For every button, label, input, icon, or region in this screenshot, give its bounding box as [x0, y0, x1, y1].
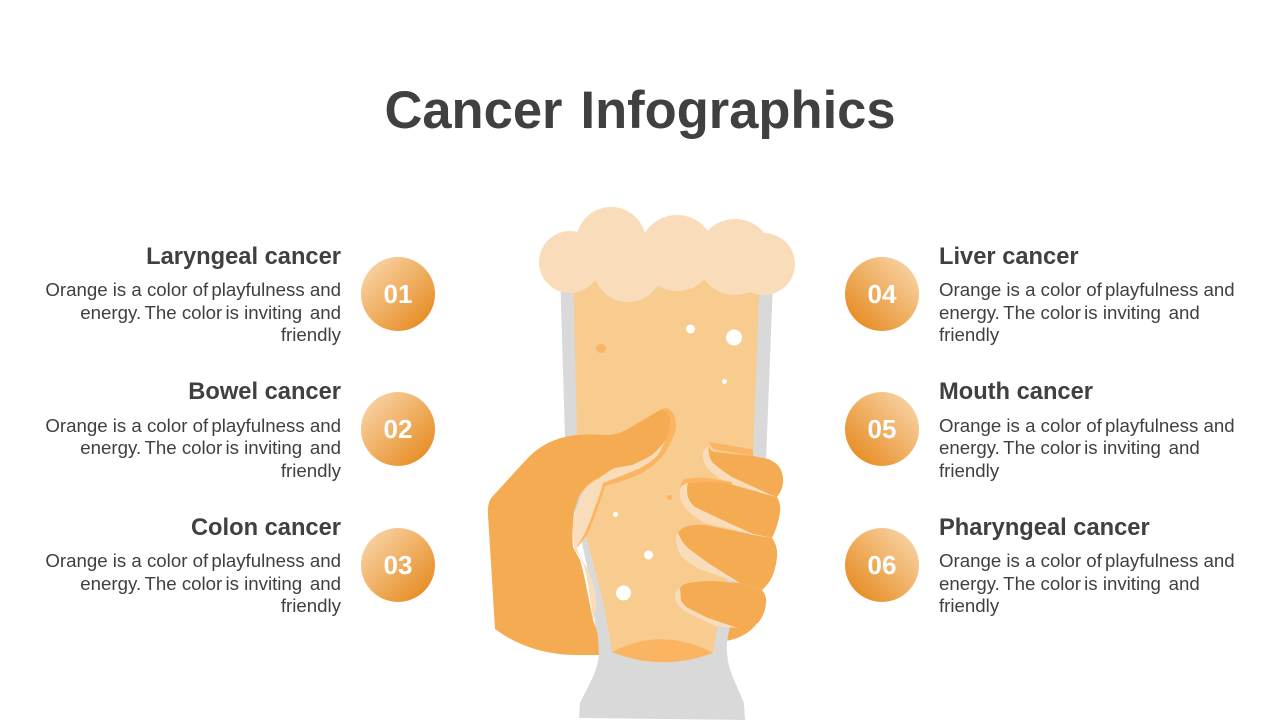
body text	[939, 550, 1235, 616]
heading: Laryngeal cancer	[146, 244, 341, 270]
body text: Orange is a color of playfulness and	[939, 550, 1235, 571]
body text: friendly	[939, 460, 999, 480]
item 05: Mouth cancer	[845, 379, 1235, 481]
body text: Orange is a color of playfulness and	[45, 279, 341, 300]
wrist sliver highlight	[573, 540, 596, 620]
heading: Bowel cancer	[188, 379, 341, 405]
body text: energy. The color is inviting and	[939, 437, 1200, 458]
finger 1	[703, 442, 783, 497]
beer bottom	[612, 639, 713, 662]
body text: friendly	[939, 595, 999, 616]
body text	[45, 414, 341, 481]
hand: palm and thumb	[488, 410, 670, 655]
item 03: Colon cancer	[45, 514, 435, 616]
heading: Mouth cancer	[939, 379, 1093, 405]
item 04: Liver cancer	[845, 244, 1235, 345]
thumb inner highlight	[572, 441, 665, 547]
item 01: Laryngeal cancer	[45, 244, 435, 345]
body text: energy. The color is inviting and	[939, 302, 1200, 322]
hand: lower palm behind glass	[715, 620, 758, 641]
item 02: Bowel cancer	[45, 379, 435, 481]
finger 2	[680, 478, 780, 538]
bubbles	[596, 324, 742, 600]
finger 3	[676, 525, 777, 590]
body text: friendly	[939, 324, 999, 345]
body text: energy. The color is inviting and	[939, 572, 1200, 594]
number badge	[845, 257, 919, 331]
body text: energy. The color is inviting and	[80, 302, 341, 322]
heading: Pharyngeal cancer	[939, 514, 1150, 540]
body text: energy. The color is inviting and	[80, 572, 341, 594]
body text: Orange is a color of playfulness and	[45, 550, 341, 571]
number badge	[361, 528, 435, 602]
body text	[939, 279, 1235, 345]
body text: friendly	[281, 595, 341, 616]
number badge: 06	[868, 550, 896, 580]
number badge	[845, 392, 919, 466]
body text: friendly	[281, 324, 341, 345]
body text: Orange is a color of playfulness and	[45, 414, 341, 436]
number badge: 05	[868, 414, 896, 444]
glass	[560, 270, 774, 720]
foam	[539, 207, 795, 302]
number badge	[361, 257, 435, 331]
number badge	[845, 528, 919, 602]
heading: Liver cancer	[939, 244, 1079, 270]
thumb shadow	[577, 408, 676, 548]
number badge: 02	[384, 414, 412, 444]
body text	[939, 414, 1235, 481]
body text	[45, 550, 341, 616]
title: Cancer Infographics	[384, 81, 896, 140]
item 06: Pharyngeal cancer	[845, 514, 1235, 616]
heading: Colon cancer	[191, 514, 341, 540]
number badge: 03	[384, 550, 412, 580]
finger 4	[675, 581, 766, 628]
body text: friendly	[281, 460, 341, 480]
number badge: 04	[868, 279, 896, 309]
body text	[45, 279, 341, 345]
body text: Orange is a color of playfulness and	[939, 414, 1235, 436]
beer	[573, 270, 760, 653]
number badge	[361, 392, 435, 466]
body text: Orange is a color of playfulness and	[939, 279, 1235, 300]
number badge: 01	[384, 279, 412, 309]
body text: energy. The color is inviting and	[80, 437, 341, 458]
